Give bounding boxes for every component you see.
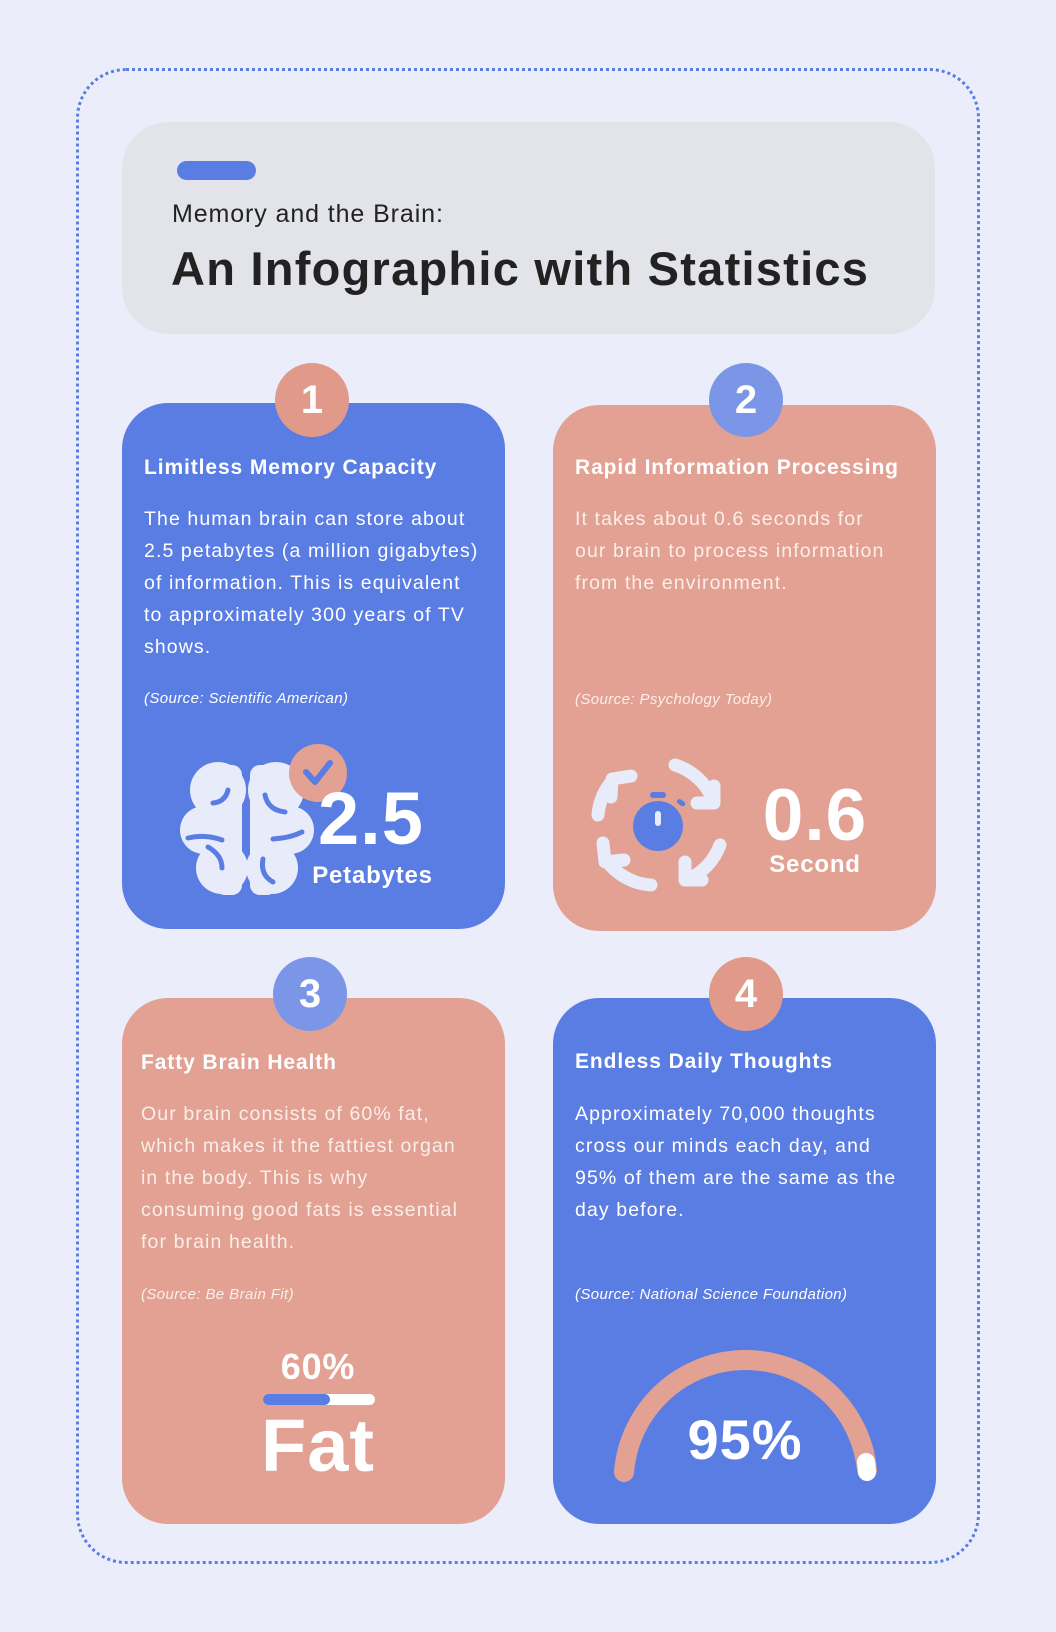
number badge 2: 2 <box>735 378 757 422</box>
body text: It takes about 0.6 seconds for <box>575 508 864 530</box>
body text: from the environment. <box>575 572 788 594</box>
body text: our brain to process information <box>575 540 884 562</box>
body text: for brain health. <box>141 1231 295 1253</box>
card title: Rapid Information Processing <box>575 456 899 479</box>
subtitle: Memory and the Brain: <box>172 200 444 228</box>
body text <box>575 1103 896 1221</box>
body text: to approximately 300 years of TV <box>144 604 465 626</box>
source: (Source: National Science Foundation) <box>575 1286 847 1303</box>
panel: card 3 <box>122 998 505 1524</box>
body text: The human brain can store about <box>144 508 465 530</box>
progress bar <box>263 1394 375 1405</box>
stat label: Petabytes: Petabytes <box>312 862 433 889</box>
source: (Source: Psychology Today) <box>575 691 772 708</box>
source: (Source: Be Brain Fit) <box>141 1286 294 1303</box>
body text: which makes it the fattiest organ <box>141 1135 456 1157</box>
body text: of information. This is equivalent <box>144 572 461 594</box>
body text: in the body. This is why <box>141 1167 368 1189</box>
body text <box>575 508 884 594</box>
check badge <box>289 744 347 802</box>
title: An Infographic with Statistics <box>171 242 869 295</box>
stat: 60%: 60% <box>281 1346 355 1387</box>
stat: 0.6: 0.6 <box>763 775 867 856</box>
header panel <box>122 122 935 334</box>
stat label: Fat: Fat <box>261 1404 375 1487</box>
body text: shows. <box>144 636 211 658</box>
panel: card 2 <box>553 405 936 931</box>
body text <box>141 1103 458 1253</box>
body text: 2.5 petabytes (a million gigabytes) <box>144 540 478 562</box>
icon: refresh stopwatch <box>592 758 726 892</box>
card title: Endless Daily Thoughts <box>575 1050 833 1073</box>
body text: Approximately 70,000 thoughts <box>575 1103 876 1125</box>
body text: 95% of them are the same as the <box>575 1167 896 1189</box>
gauge chart <box>614 1350 877 1482</box>
body text: cross our minds each day, and <box>575 1135 871 1157</box>
stat: 2.5: 2.5 <box>318 777 424 860</box>
number badge 1: 1 <box>301 378 323 422</box>
number badge 3: 3 <box>299 972 321 1016</box>
number badge 3 <box>273 957 347 1031</box>
dotted border frame <box>76 68 980 1564</box>
accent pill <box>177 161 256 180</box>
body text: day before. <box>575 1199 685 1221</box>
stat: 95%: 95% <box>687 1408 803 1471</box>
source: (Source: Scientific American) <box>144 690 348 707</box>
card title: Limitless Memory Capacity <box>144 456 437 479</box>
icon: brain with check <box>180 744 347 895</box>
panel: card 1 <box>122 403 505 929</box>
number badge 2 <box>709 363 783 437</box>
body text <box>144 508 478 658</box>
panel: card 4 <box>553 998 936 1524</box>
card title: Fatty Brain Health <box>141 1051 337 1074</box>
number badge 4: 4 <box>735 972 757 1016</box>
number badge 4 <box>709 957 783 1031</box>
body text: consuming good fats is essential <box>141 1199 458 1221</box>
stat label: Second: Second <box>769 851 861 878</box>
number badge 1 <box>275 363 349 437</box>
body text: Our brain consists of 60% fat, <box>141 1103 430 1125</box>
